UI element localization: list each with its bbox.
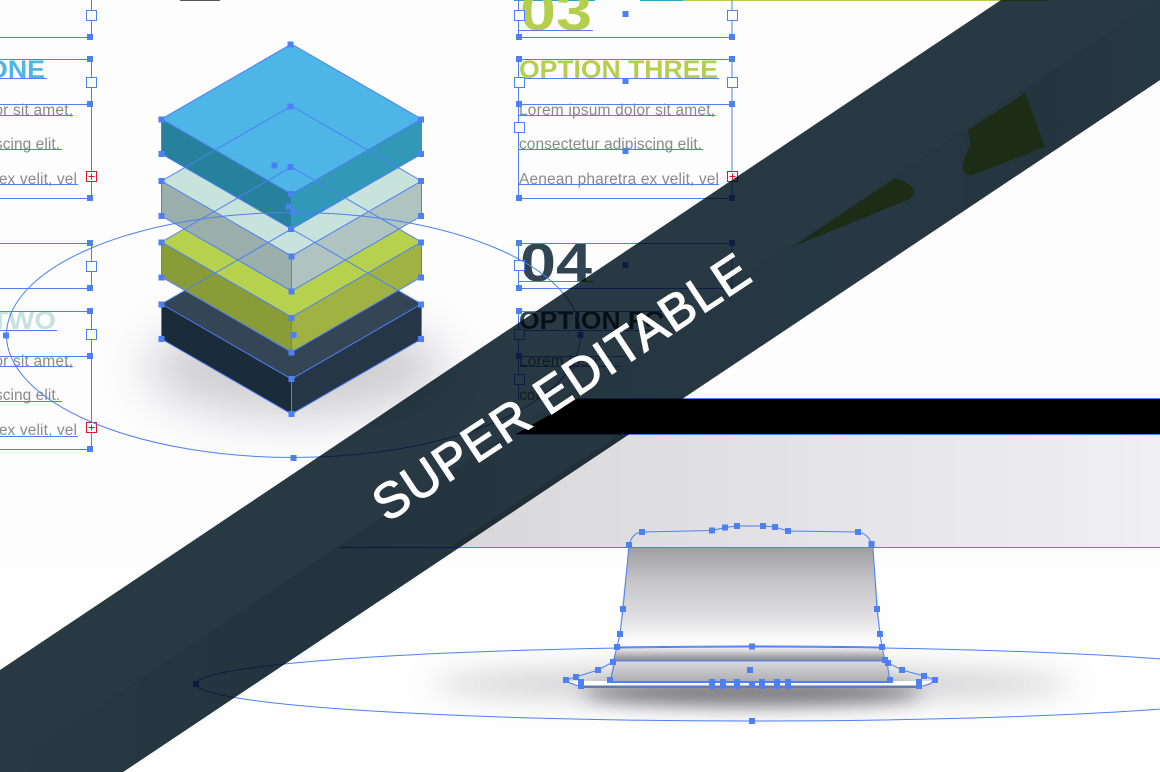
- layer 2 pale: [162, 106, 422, 291]
- monitor stand: [568, 547, 932, 688]
- monitor stand shadow: [432, 667, 1072, 706]
- option two body: [0, 353, 77, 439]
- black monitor bar: [516, 399, 1160, 434]
- option four fragments under banner: [520, 312, 664, 400]
- layer 1 blue: [162, 44, 422, 229]
- stack shadow: [146, 318, 446, 418]
- number 04: 04: [520, 233, 592, 293]
- icon: green highlight fragments on ribbon: [792, 93, 1045, 247]
- option one body: [0, 102, 77, 188]
- option four fragments under banner: consectetur adipiscing elit.: [519, 387, 702, 404]
- stand base: [610, 661, 890, 682]
- right column selection boxes: [514, 0, 738, 400]
- stand and ground wireframe: [196, 398, 1160, 721]
- option three body: Lorem ipsum dolor sit amet,: [519, 102, 715, 119]
- option four fragments under banner: Lorem ipsum dolor sit amet,: [519, 353, 715, 370]
- option three body: Aenean pharetra ex velit, vel: [519, 171, 719, 188]
- panel: left text column: [0, 0, 96, 450]
- top edge colour strip: [180, 0, 1048, 1]
- option three heading: OPTION THREE: [519, 56, 718, 84]
- monitor chin grey band: [450, 434, 1160, 547]
- layer 4 dark: [162, 229, 422, 414]
- foot highlight: [568, 681, 932, 687]
- layer 3 green: [162, 167, 422, 352]
- left column selection boxes: [0, 0, 96, 450]
- stand neck: [617, 547, 882, 647]
- option four fragments under banner: OPTION FOUR: [519, 307, 703, 335]
- stack wireframe and anchor points: [162, 44, 422, 414]
- option three body: consectetur adipiscing elit.: [519, 136, 702, 153]
- stand shaded fold: [613, 647, 885, 661]
- panel: right text column: [514, 0, 738, 404]
- option three body: [519, 102, 719, 188]
- banner text: SUPER EDITABLE: [362, 243, 760, 532]
- chart: isometric layer stack: [162, 44, 422, 414]
- stack ground ellipse outline: [6, 212, 580, 458]
